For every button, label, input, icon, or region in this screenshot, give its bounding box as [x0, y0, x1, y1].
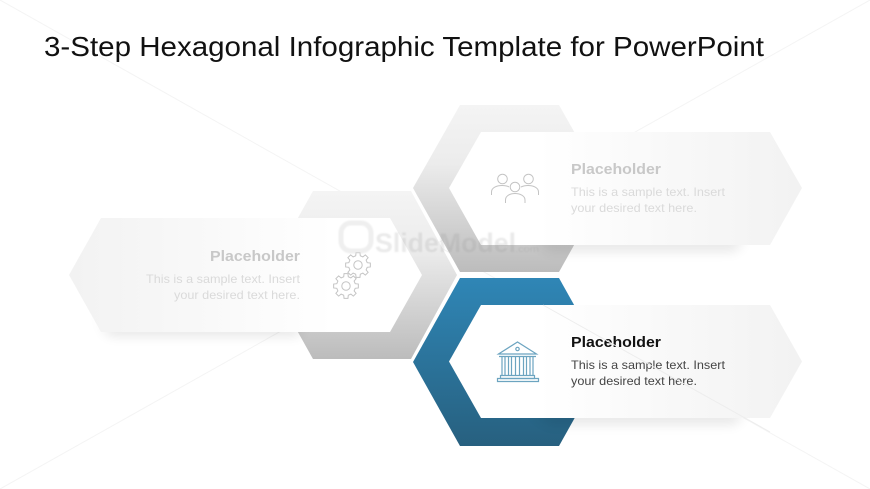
panel: bottom right step — [449, 305, 802, 424]
hexagon: left grey — [266, 191, 457, 359]
body text: left: This is a sample text. Insert — [146, 272, 301, 286]
heading: top: Placeholder — [571, 161, 661, 178]
body text: top: This is a sample text. Insert — [571, 185, 726, 199]
faint diagonal segment over bottom panel — [543, 305, 770, 432]
body text: top: your desired text here. — [571, 201, 697, 215]
icon: people — [492, 174, 538, 203]
icon: gears — [334, 253, 370, 298]
body text: bottom: your desired text here. — [571, 374, 697, 388]
body text: top — [571, 185, 726, 215]
panel: left step — [69, 218, 422, 335]
title: 3-Step Hexagonal Infographic Template for PowerPoint — [44, 31, 764, 62]
hexagon: top right grey — [413, 105, 606, 272]
body text: left — [146, 272, 301, 302]
body text: left: your desired text here. — [174, 288, 300, 302]
heading: left: Placeholder — [210, 248, 300, 265]
icon: bank building — [498, 342, 538, 382]
heading: bottom: Placeholder — [571, 334, 661, 351]
body text: bottom — [571, 358, 726, 388]
watermark: SlideModel logo: .com — [515, 244, 539, 254]
body text: bottom: This is a sample text. Insert — [571, 358, 726, 372]
watermark: SlideModel logo: SlideModel — [375, 228, 516, 258]
hexagon: bottom right blue — [413, 278, 606, 446]
watermark: SlideModel logo — [341, 223, 539, 258]
panel: top right step — [449, 132, 802, 251]
